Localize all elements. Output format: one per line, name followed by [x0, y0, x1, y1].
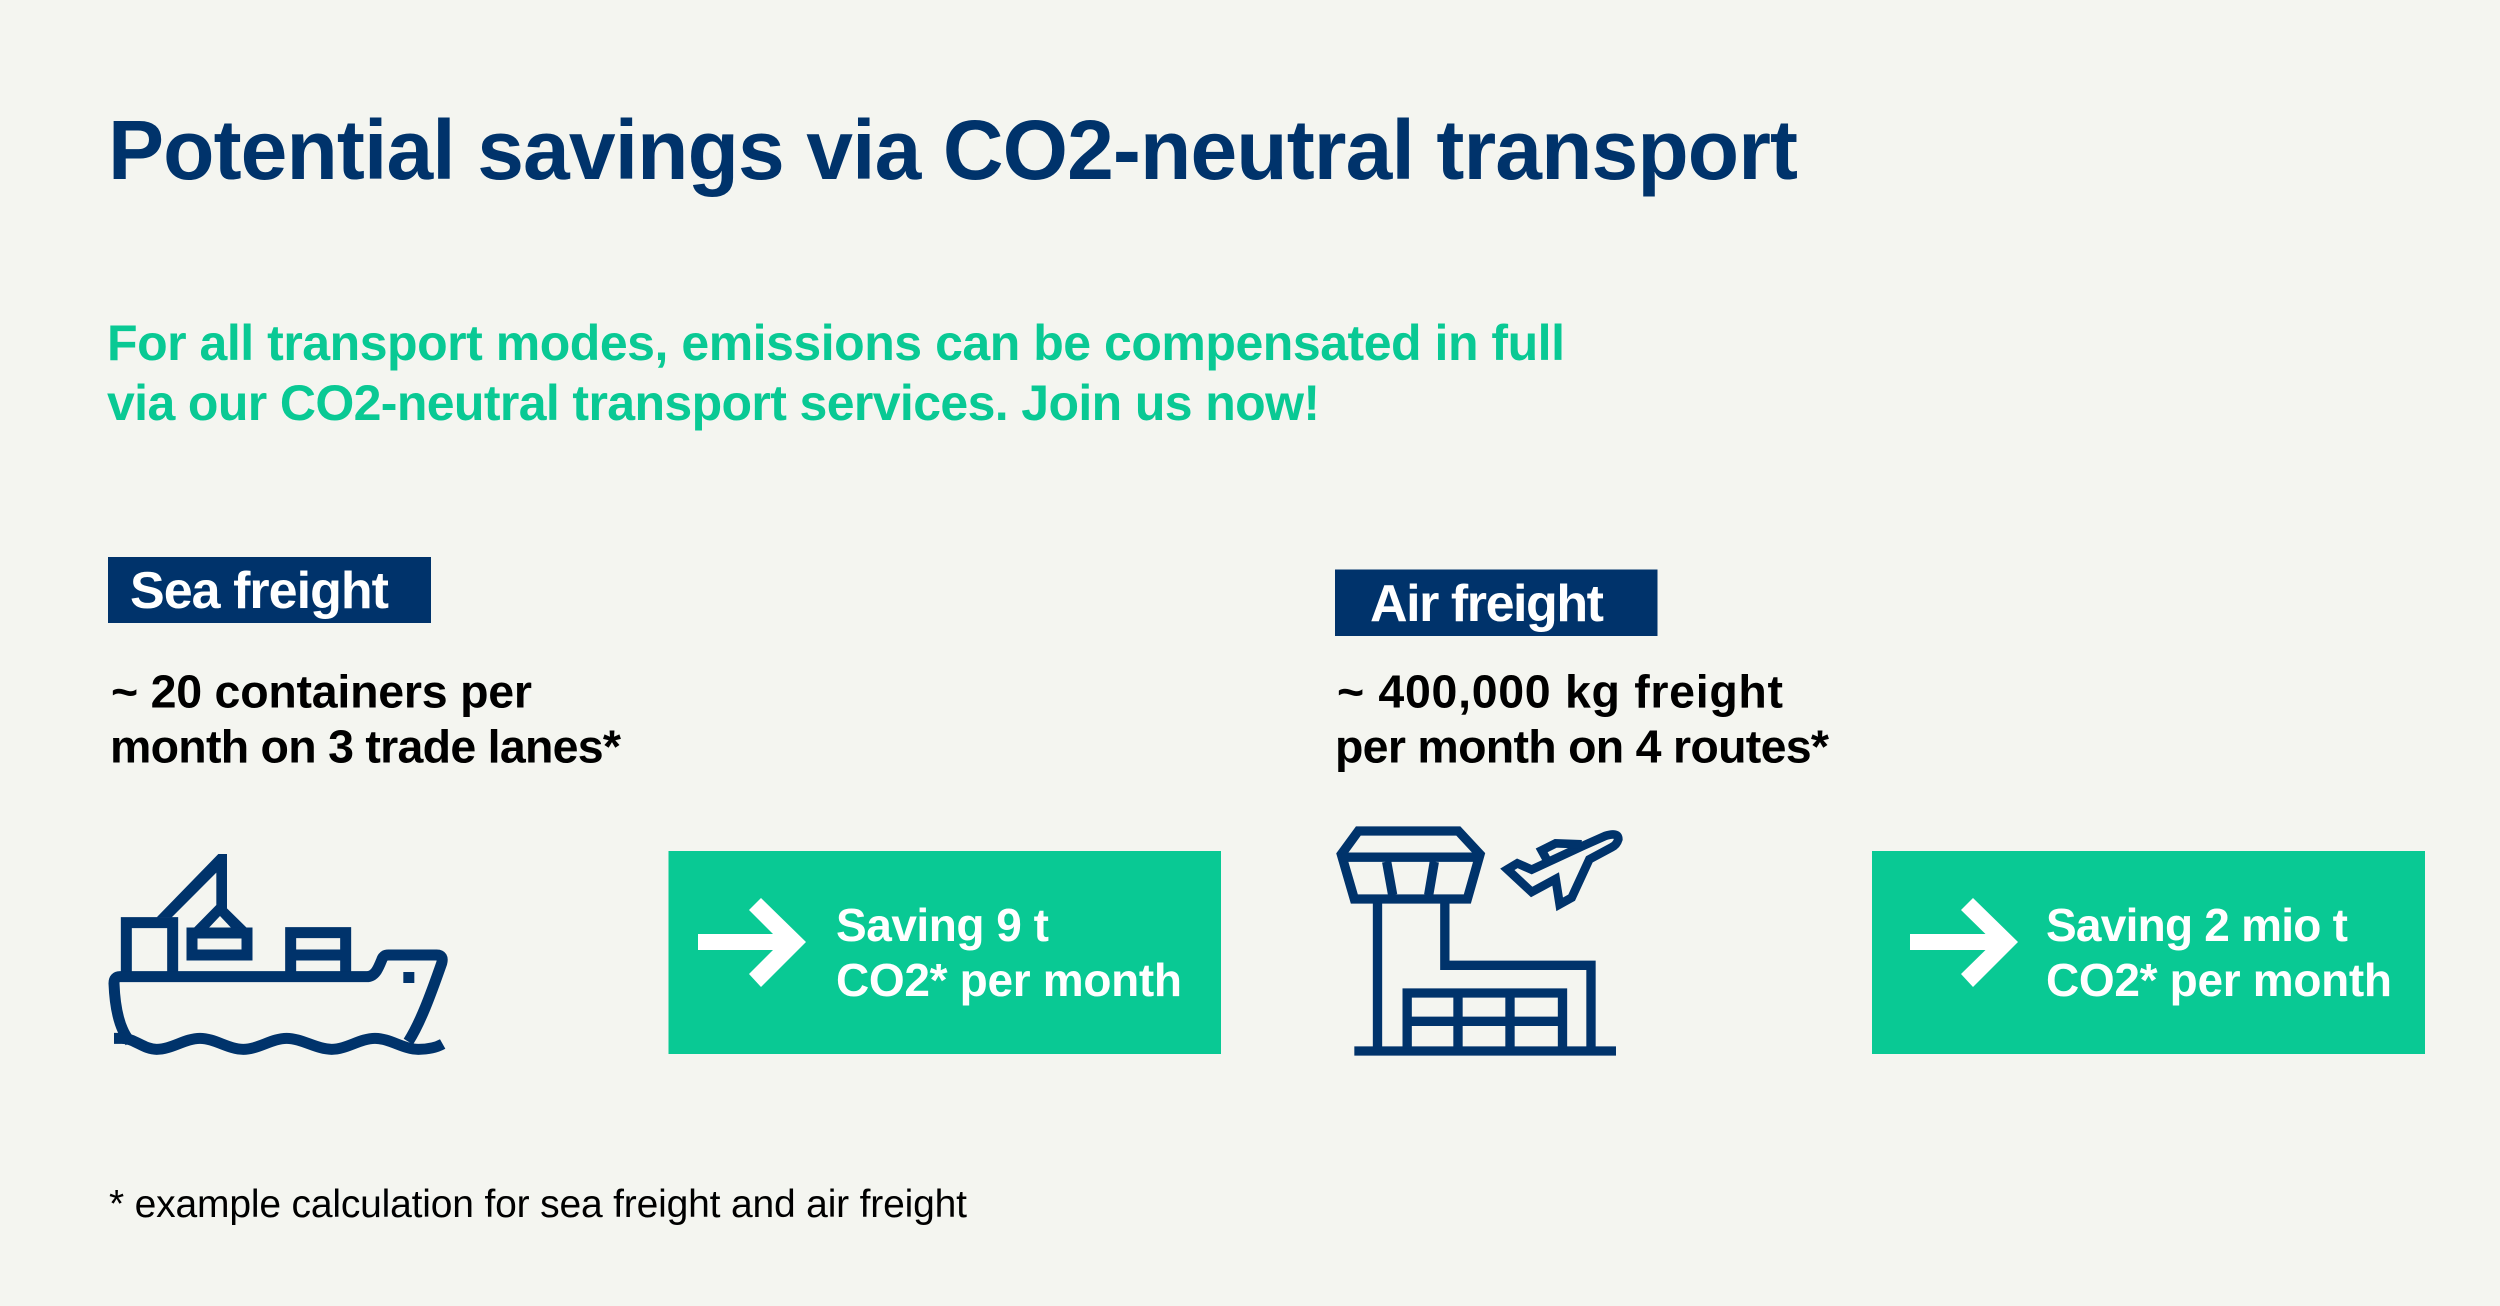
- footnote: * example calculation for sea freight and air freight: [109, 1183, 967, 1226]
- arrow: air saving: [1910, 898, 2018, 987]
- text: air saving: [2046, 899, 2392, 1006]
- icon: container ship: [114, 854, 443, 1049]
- text: air saving: Saving 2 mio t: [2046, 899, 2348, 951]
- text: sea freight volume: [110, 666, 622, 772]
- text: air saving: CO2* per month: [2046, 954, 2392, 1006]
- panel: air freight label: [1335, 570, 1658, 636]
- panel: air freight label: Air freight: [1370, 575, 1604, 633]
- panel: air freight saving: [1872, 851, 2425, 1054]
- text: sea saving: CO2* per month: [836, 954, 1182, 1006]
- text: sea freight volume: ~ 20 containers per: [111, 666, 532, 718]
- text: sea saving: [836, 899, 1182, 1006]
- panel: sea freight label: Sea freight: [130, 562, 389, 620]
- text: sea freight volume: month on 3 trade lanes*: [110, 720, 622, 772]
- text: air freight volume: per month on 4 routes*: [1335, 720, 1830, 772]
- subtitle: via our CO2-neutral transport services. Join us now!: [107, 375, 1320, 431]
- panel: sea freight saving: [668, 851, 1221, 1054]
- icon: airport tower and plane: [1341, 831, 1618, 1051]
- arrow: sea saving: [698, 898, 806, 987]
- text: sea saving: Saving 9 t: [836, 899, 1049, 951]
- text: air freight volume: [1335, 666, 1830, 772]
- text: air freight volume: ~ 400,000 kg freight: [1337, 666, 1783, 718]
- subtitle: For all transport modes, emissions can be compensated in full: [107, 315, 1565, 371]
- subtitle: [107, 315, 1565, 431]
- title: Potential savings via CO2-neutral transport: [108, 103, 1798, 197]
